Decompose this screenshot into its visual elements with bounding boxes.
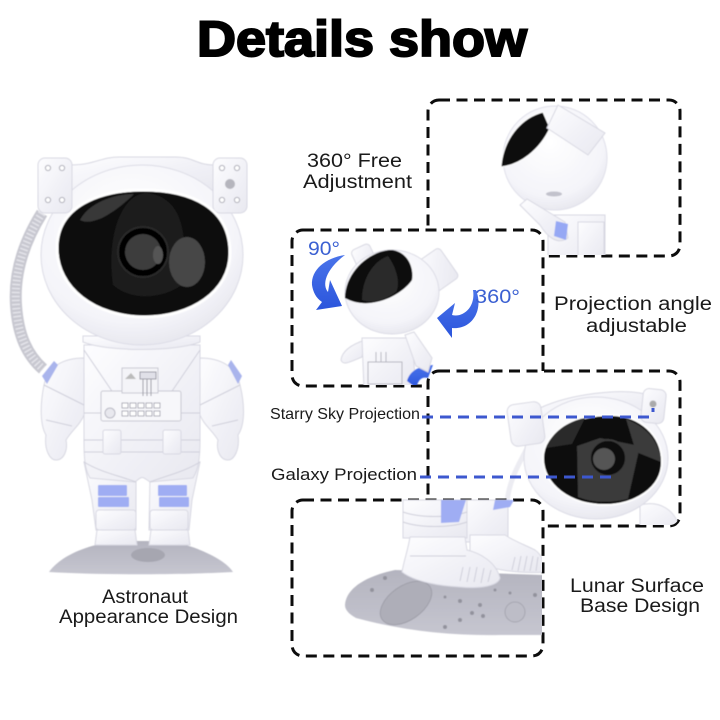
right arm [200, 358, 244, 460]
label: galaxy projection: Galaxy Projection [271, 465, 417, 484]
helmet [41, 165, 243, 345]
lens [590, 440, 626, 476]
label: 360 free adjustment: Adjustment [303, 172, 413, 193]
label: 90 degrees: 90° [308, 239, 340, 260]
panel: rotation frame [292, 230, 543, 386]
lower blue arrow [407, 365, 433, 388]
shoulder accents [42, 360, 242, 384]
label: projection angle adjustable: adjustable [586, 316, 687, 337]
blue arm patch [554, 221, 568, 240]
helmet top strap [70, 157, 215, 190]
visor [501, 112, 550, 167]
moon rock [345, 570, 543, 635]
visor [543, 415, 662, 505]
torso and backpack [548, 215, 605, 260]
label: 360 free adjustment [303, 151, 413, 193]
button [650, 400, 656, 408]
chest control panel [101, 368, 181, 421]
belt clips [103, 430, 181, 454]
visor [57, 190, 230, 317]
leg bands [98, 485, 189, 507]
label: lunar surface base design: Lunar Surface [570, 576, 704, 597]
lunar base closeup [345, 500, 545, 635]
main astronaut illustration [16, 157, 247, 574]
rotation astronaut [341, 243, 459, 390]
label: projection angle adjustable: Projection angle [554, 294, 712, 315]
right leg and boot [462, 500, 545, 572]
neck ring [83, 336, 200, 350]
label: 360 degrees: 360° [475, 287, 520, 308]
visor reflection [362, 256, 398, 302]
shoulder [638, 502, 678, 525]
helmet strap [541, 390, 643, 415]
title: Details show [197, 11, 527, 67]
lens core [593, 448, 615, 470]
left ear panel [506, 401, 546, 447]
left leg and boot [402, 500, 500, 588]
label: astronaut appearance design: Astronaut [102, 587, 189, 608]
raised arm [405, 332, 432, 372]
label: starry sky projection: Starry Sky Projection [270, 406, 420, 423]
projection astronaut [506, 388, 680, 530]
label: lunar surface base design [570, 576, 704, 617]
panel: lunar base frame [292, 500, 543, 656]
visor reflections [80, 193, 205, 296]
galaxy projection line [420, 476, 612, 478]
arm [520, 199, 568, 241]
torso [84, 345, 200, 482]
label: astronaut appearance design [59, 587, 238, 628]
lens [118, 227, 168, 277]
cable [505, 450, 524, 500]
adjustment astronaut [501, 105, 607, 260]
panel: projection frame [428, 371, 680, 526]
left arm [41, 358, 84, 460]
right ear panel [640, 388, 667, 424]
leg bands [441, 500, 514, 523]
craters [370, 576, 538, 630]
label: astronaut appearance design: Appearance Design [59, 607, 238, 628]
lunar base [49, 541, 233, 574]
left ear panel [350, 243, 374, 264]
90 degree blue arrow [312, 255, 345, 310]
label: lunar surface base design: Base Design [580, 596, 700, 617]
legs [84, 462, 200, 545]
ear strap [547, 105, 605, 155]
label: 360 free adjustment: 360° Free [307, 151, 402, 172]
helmet [345, 250, 439, 334]
left arm [341, 340, 365, 363]
helmet [524, 397, 668, 519]
starry sky projection line [422, 408, 653, 417]
side slot [546, 192, 562, 196]
ear panels [38, 158, 247, 213]
panel: 360 free adjustment frame [428, 100, 680, 256]
helmet [503, 106, 607, 210]
label: projection angle adjustable [554, 294, 712, 337]
crater [131, 548, 165, 562]
right ear strap [422, 248, 459, 291]
cable [16, 213, 43, 369]
torso [362, 338, 416, 390]
visor [345, 250, 412, 303]
chest panel [368, 352, 402, 384]
360 degree blue arrow [437, 290, 479, 338]
visor reflections [546, 418, 661, 502]
